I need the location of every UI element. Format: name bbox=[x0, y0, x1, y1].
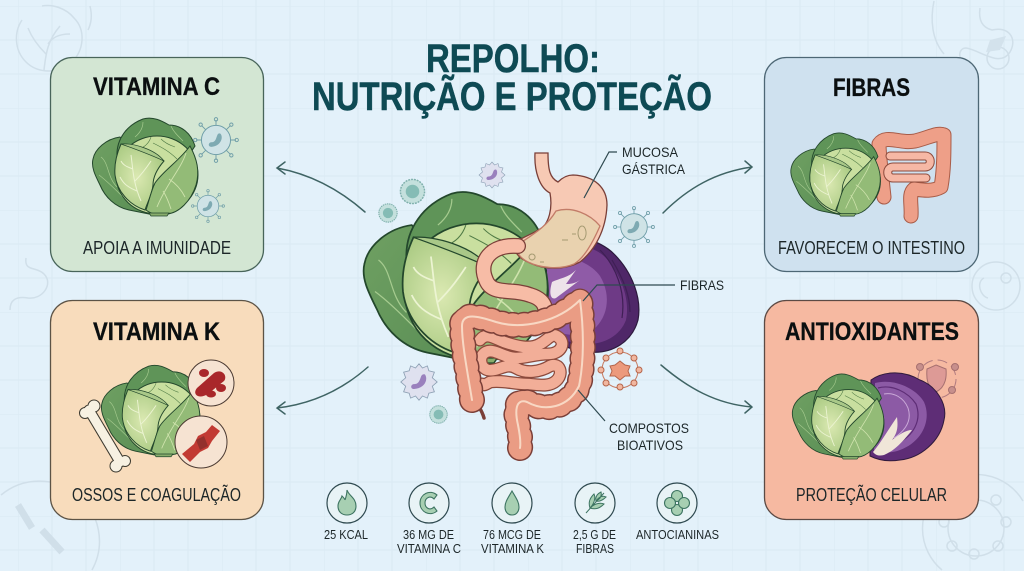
heading: vitamina K: VITAMINA K bbox=[93, 318, 220, 346]
arrow: to vitamina C bbox=[277, 162, 365, 212]
icon: cabbage bbox=[92, 118, 198, 216]
icon: cabbage bbox=[101, 365, 200, 457]
panel: antioxidantes bbox=[764, 300, 978, 520]
icon: stomach bbox=[515, 153, 607, 268]
stat: vitamin C: VITAMINA C bbox=[397, 542, 461, 556]
stat: fibers bbox=[573, 483, 616, 556]
decorative icon: stomach left bbox=[10, 258, 48, 310]
icon: bone bbox=[80, 400, 130, 472]
callout: compostos bioativos bbox=[578, 390, 689, 453]
heading: fibras: FIBRAS bbox=[833, 74, 910, 102]
icon: cell spore top bbox=[400, 179, 425, 204]
arrow: to vitamina K bbox=[277, 367, 368, 414]
icon: shield bbox=[916, 360, 958, 398]
heading: antioxidantes: ANTIOXIDANTES bbox=[785, 318, 959, 346]
decorative icon: cabbage outline top left bbox=[16, 6, 91, 71]
icon: immune cell right bbox=[614, 207, 654, 247]
stat: fibers: FIBRAS bbox=[576, 542, 614, 556]
stat: anthocyanins: ANTOCIANINAS bbox=[636, 528, 719, 542]
stat: anthocyanins bbox=[636, 483, 719, 542]
icon: red cabbage center bbox=[547, 236, 639, 352]
title: REPOLHO: bbox=[426, 37, 600, 81]
icon: duodenum bbox=[484, 246, 545, 308]
caption: vitamina C: APOIA A IMUNIDADE bbox=[83, 238, 231, 258]
stat: calories: 25 KCAL bbox=[324, 528, 368, 542]
callout: mucosa gástrica: MUCOSA bbox=[622, 144, 679, 160]
icon: cell purple bottom bbox=[401, 364, 437, 400]
icon: green cabbage center bbox=[364, 192, 548, 363]
stat: fibers: 2,5 G DE bbox=[573, 528, 616, 542]
stat: vitamin K: 76 MCG DE bbox=[483, 528, 541, 542]
callout: compostos bioativos: COMPOSTOS bbox=[609, 420, 689, 436]
callout: fibras bbox=[583, 277, 724, 301]
decorative icon: bones bottom left bbox=[1, 481, 99, 570]
arrow: to fibras bbox=[663, 161, 752, 213]
stat: vitamin C: 36 MG DE bbox=[403, 528, 454, 542]
icon: cell spore small bbox=[379, 204, 397, 222]
icon: cell purple top bbox=[479, 162, 505, 188]
icon: immune cell small bbox=[191, 189, 225, 223]
decorative icon: antioxidant ring bottom right bbox=[923, 474, 1023, 570]
icon: red cabbage bbox=[870, 373, 945, 461]
icon: cabbage bbox=[791, 133, 880, 216]
title bbox=[312, 37, 712, 119]
caption: antioxidantes: PROTEÇÃO CELULAR bbox=[796, 484, 947, 505]
stat: vitamin K: VITAMINA K bbox=[481, 542, 545, 556]
callout: fibras: FIBRAS bbox=[680, 277, 724, 293]
icon: cell spore bottom bbox=[430, 406, 447, 423]
decorative icon: stomach top right bbox=[932, 1, 1013, 69]
icon: vessel clot bbox=[175, 416, 227, 468]
heading: vitamina C: VITAMINA C bbox=[93, 73, 220, 101]
icon: compound ring bbox=[598, 348, 642, 390]
icon: blood cells bbox=[188, 360, 234, 406]
caption: vitamina K: OSSOS E COAGULAÇÃO bbox=[72, 484, 241, 505]
icon: small intestine bbox=[480, 335, 562, 385]
stat: vitamin K bbox=[481, 483, 545, 556]
icon: large intestine bbox=[462, 300, 583, 448]
stat: vitamin C bbox=[397, 483, 461, 556]
icon: immune cell large bbox=[194, 118, 238, 162]
nutrition facts row bbox=[324, 483, 719, 556]
panel: vitamina C bbox=[50, 58, 264, 272]
illustration: digestive system and cabbage bbox=[364, 153, 654, 448]
panel: vitamina K bbox=[50, 300, 264, 520]
callout: mucosa gástrica bbox=[584, 144, 686, 198]
caption: fibras: FAVORECEM O INTESTINO bbox=[778, 238, 965, 258]
stat: calories bbox=[324, 483, 368, 542]
callout: mucosa gástrica: GÁSTRICA bbox=[622, 161, 686, 177]
panel: fibras bbox=[764, 58, 978, 272]
decorative icon: gut right bbox=[972, 262, 1020, 310]
icon: intestine bbox=[879, 134, 944, 216]
icon: cabbage bbox=[792, 374, 884, 459]
callout: compostos bioativos: BIOATIVOS bbox=[617, 437, 683, 453]
title: NUTRIÇÃO E PROTEÇÃO bbox=[312, 73, 712, 119]
arrow: to antioxidantes bbox=[661, 365, 752, 413]
